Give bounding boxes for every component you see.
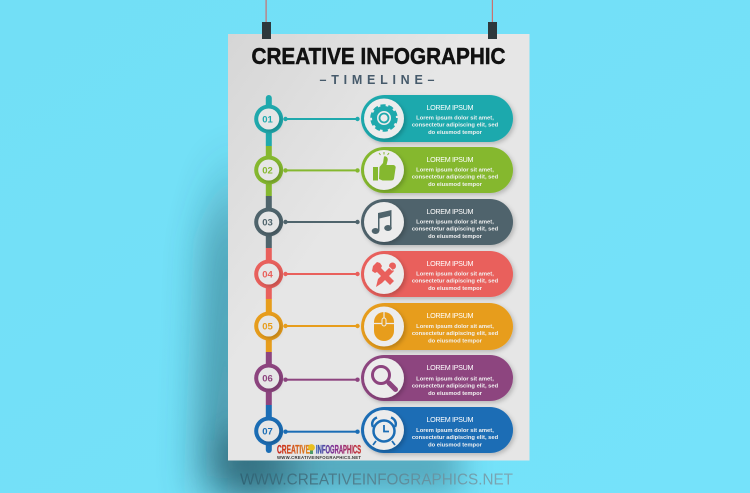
marker 05: 05 bbox=[262, 322, 273, 332]
card 05: consectetur adipiscing elit, sed bbox=[412, 331, 499, 337]
card 01: Lorem ipsum dolor sit amet, bbox=[416, 116, 494, 122]
icon: thumbs up bbox=[373, 152, 396, 180]
card 05: do eiusmod tempor bbox=[428, 338, 483, 344]
card 05: Lorem ipsum dolor sit amet, bbox=[416, 324, 494, 330]
card 06 bbox=[361, 355, 513, 401]
card 07: LOREM IPSUM bbox=[426, 415, 474, 424]
card 07: Lorem ipsum dolor sit amet, bbox=[416, 428, 494, 434]
card 07: do eiusmod tempor bbox=[428, 442, 483, 448]
card 06: LOREM IPSUM bbox=[426, 363, 474, 372]
card 01: consectetur adipiscing elit, sed bbox=[412, 123, 499, 129]
connector 06 bbox=[283, 378, 360, 382]
card 01: LOREM IPSUM bbox=[426, 103, 474, 112]
connector 01 bbox=[283, 117, 360, 121]
card 02: LOREM IPSUM bbox=[426, 155, 474, 164]
card 04 bbox=[361, 251, 513, 297]
connector 02 bbox=[283, 168, 360, 173]
timeline row 05 bbox=[254, 303, 513, 350]
card 06: do eiusmod tempor bbox=[428, 391, 483, 397]
marker 04 bbox=[254, 260, 283, 288]
marker 01 bbox=[254, 104, 283, 134]
marker 03: 03 bbox=[262, 218, 273, 228]
card 04: do eiusmod tempor bbox=[428, 286, 483, 292]
card 05 bbox=[361, 303, 513, 350]
timeline row 06 bbox=[254, 355, 513, 401]
card 04: Lorem ipsum dolor sit amet, bbox=[416, 272, 494, 278]
card 03: Lorem ipsum dolor sit amet, bbox=[416, 220, 494, 226]
subtitle: –TIMELINE– bbox=[320, 73, 435, 87]
card 01: do eiusmod tempor bbox=[428, 130, 483, 136]
card 07 bbox=[361, 407, 513, 453]
card 03: consectetur adipiscing elit, sed bbox=[412, 227, 499, 233]
marker 07: 07 bbox=[262, 426, 273, 438]
card 04: consectetur adipiscing elit, sed bbox=[412, 279, 499, 285]
logo: creative infographics: CREATIVE bbox=[277, 444, 310, 456]
connector 03 bbox=[283, 220, 360, 224]
card 03 bbox=[361, 199, 513, 245]
icon: light bulb bbox=[308, 444, 315, 454]
marker 02 bbox=[254, 156, 283, 184]
card 07: consectetur adipiscing elit, sed bbox=[412, 435, 499, 441]
card 02: consectetur adipiscing elit, sed bbox=[412, 175, 499, 181]
card 05: LOREM IPSUM bbox=[426, 311, 474, 320]
logo: creative infographics: WWW.CREATIVEINFOGRAPHICS.NET bbox=[277, 455, 361, 460]
marker 04: 04 bbox=[262, 270, 273, 280]
website url: WWW.CREATIVEINFOGRAPHICS.NET bbox=[240, 472, 514, 488]
timeline row 04 bbox=[254, 251, 513, 297]
connector 05 bbox=[283, 324, 360, 328]
connector 04 bbox=[283, 272, 360, 276]
card 03: do eiusmod tempor bbox=[428, 234, 483, 240]
marker 07 bbox=[254, 416, 283, 446]
card 04: LOREM IPSUM bbox=[426, 259, 474, 268]
timeline row 01 bbox=[254, 95, 513, 142]
timeline row 03 bbox=[254, 199, 513, 245]
timeline row 07 bbox=[254, 407, 513, 453]
marker 06: 06 bbox=[262, 374, 273, 384]
logo: creative infographics bbox=[277, 444, 361, 460]
icon: computer mouse bbox=[374, 312, 394, 341]
card 02: Lorem ipsum dolor sit amet, bbox=[416, 168, 494, 174]
card 02: do eiusmod tempor bbox=[428, 182, 483, 188]
card 06: consectetur adipiscing elit, sed bbox=[412, 384, 499, 390]
card 06: Lorem ipsum dolor sit amet, bbox=[416, 376, 494, 382]
poster sheet bbox=[228, 34, 530, 460]
card 03: LOREM IPSUM bbox=[426, 207, 474, 216]
connector 07 bbox=[283, 430, 360, 434]
card 02 bbox=[361, 147, 513, 193]
title: CREATIVE INFOGRAPHIC bbox=[252, 43, 506, 69]
timeline row 02 bbox=[254, 147, 513, 193]
logo: creative infographics: INFOGRAPHICS bbox=[316, 444, 361, 456]
marker 06 bbox=[254, 364, 283, 392]
marker 01: 01 bbox=[262, 114, 273, 126]
marker 05 bbox=[254, 312, 283, 340]
icon: music note bbox=[372, 210, 392, 234]
icon: gear bbox=[372, 106, 396, 130]
icon: magnifying glass bbox=[372, 366, 396, 390]
card 01 bbox=[361, 95, 513, 142]
timeline spine bbox=[266, 95, 272, 453]
hanging cords and clips bbox=[262, 0, 497, 39]
icon: tools bbox=[372, 262, 396, 287]
icon: alarm clock bbox=[372, 418, 396, 445]
marker 03 bbox=[254, 208, 283, 236]
marker 02: 02 bbox=[262, 166, 273, 176]
